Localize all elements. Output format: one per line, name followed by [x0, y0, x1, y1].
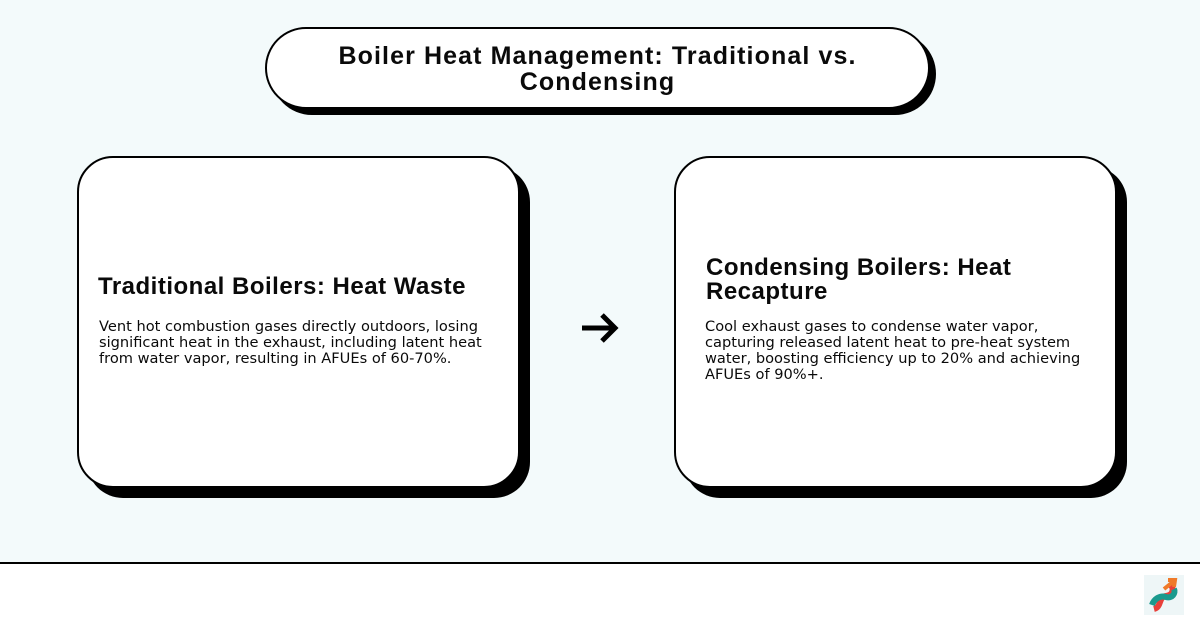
title: [265, 27, 930, 109]
panel: traditional boilers: [77, 156, 520, 488]
heading: traditional: Traditional Boilers: Heat Waste: [98, 273, 466, 300]
text: condensing: [705, 318, 1080, 383]
text: condensing: AFUEs of 90%+.: [705, 366, 824, 383]
footer strip: [0, 562, 1200, 630]
title: Condensing: [520, 68, 675, 96]
text: traditional: Vent hot combustion gases directly outdoors, losing: [99, 318, 478, 335]
panel: condensing boilers: [674, 156, 1117, 488]
text: traditional: from water vapor, resulting in AFUEs of 60-70%.: [99, 350, 451, 367]
heading: condensing: [706, 254, 1011, 305]
left card shadow: [87, 166, 530, 498]
heading: condensing: Condensing Boilers: Heat: [706, 254, 1011, 281]
title: Boiler Heat Management: Traditional vs.: [338, 42, 856, 70]
right card shadow: [684, 166, 1127, 498]
text: traditional: significant heat in the exhaust, including latent heat: [99, 334, 482, 351]
title pill shadow: [271, 33, 936, 115]
icon: logo: [1144, 575, 1184, 615]
text: traditional: [99, 318, 482, 367]
text: condensing: capturing released latent heat to pre-heat system: [705, 334, 1070, 351]
heading: condensing: Recapture: [706, 278, 828, 305]
arrow: [582, 313, 618, 343]
text: condensing: Cool exhaust gases to condense water vapor,: [705, 318, 1038, 335]
text: condensing: water, boosting efficiency up to 20% and achieving: [705, 350, 1080, 367]
